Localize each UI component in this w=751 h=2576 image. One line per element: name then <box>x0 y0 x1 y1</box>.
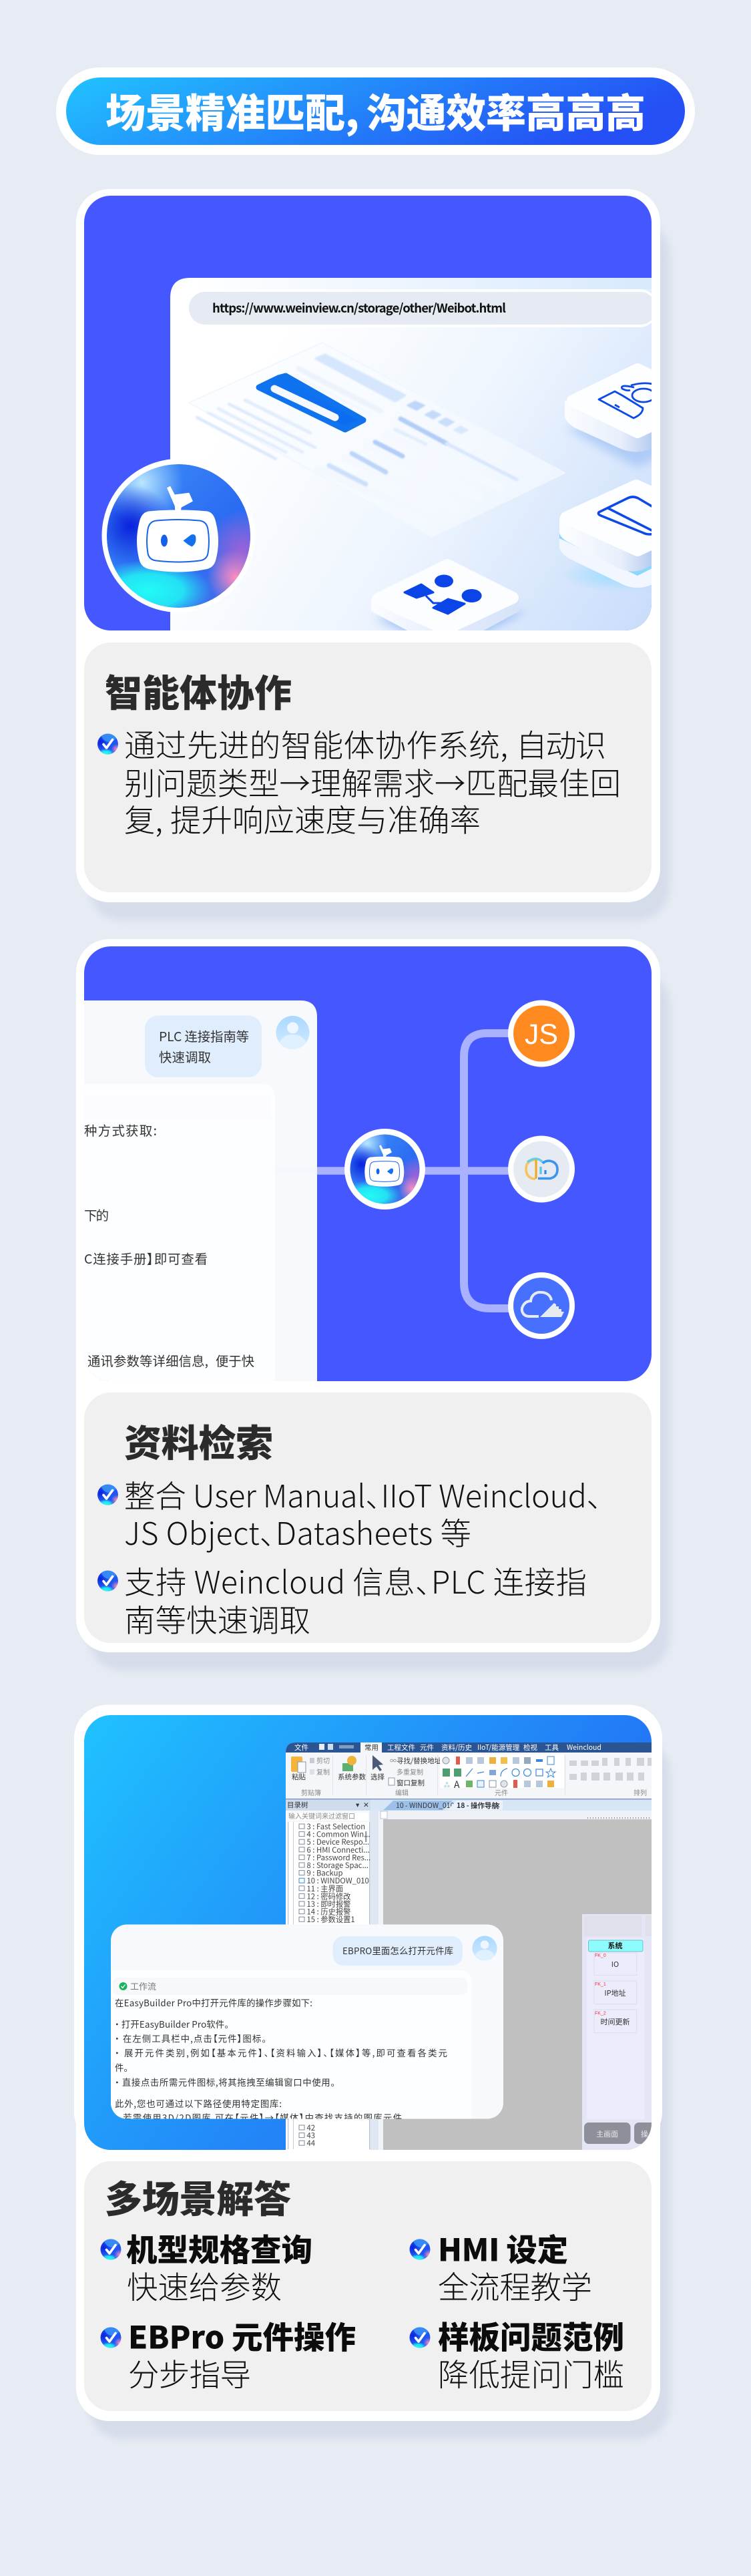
tree panel: 7 : Password Res... <box>307 1852 370 1863</box>
chat overlay <box>111 1925 503 2124</box>
user avatar <box>473 1936 497 1961</box>
body text: 复, <box>124 796 163 841</box>
answer card: • 展开元件类别,例如【基本元件】、【资料输入】、【媒体】等,即可查看各类元 <box>115 2046 447 2059</box>
title bar: 工具 <box>545 1742 559 1753</box>
bot avatar badge <box>101 459 250 612</box>
ribbon: 剪切 <box>316 1755 330 1765</box>
diagram: chat to knowledge sources <box>67 946 652 1389</box>
answer card: 下的 <box>84 1205 109 1224</box>
tree panel: 8 : Storage Spac... <box>307 1860 368 1871</box>
answer card: • 打开EasyBuilder Pro软件。 <box>115 2017 229 2030</box>
tab bar <box>286 1800 653 1811</box>
heading: 资料检索 <box>124 1414 273 1468</box>
HMI side menu: 操 <box>641 2129 648 2139</box>
user bubble: 快速调取 <box>159 1047 211 1066</box>
panel: 资料检索 card <box>67 939 670 1670</box>
tree panel: 5 : Device Respo... <box>307 1837 369 1847</box>
answer card: • 若需使用3D/2D图库,可在【元件】→【媒体】中查找支持的图库元件 <box>115 2110 402 2124</box>
ribbon: 系统参数 <box>338 1772 366 1782</box>
answer card: 在EasyBuilder Pro中打开元件库的操作步骤如下: <box>115 1996 312 2009</box>
bullet text 1: 整合 User Manual、IIoT Weincloud、 <box>124 1472 602 1517</box>
title bar: 元件 <box>420 1742 434 1753</box>
tree panel: 3 : Fast Selection <box>307 1821 365 1832</box>
HMI side menu: FK_2 <box>595 2012 606 2016</box>
title bar: 文件 <box>294 1742 308 1753</box>
check icon <box>93 726 121 758</box>
screenshot panel <box>84 1715 661 2151</box>
item: 机型规格查询: 快速给参数 <box>127 2263 282 2308</box>
node: JS: JS <box>525 1019 558 1051</box>
center bot node <box>344 1129 425 1210</box>
HMI side menu: 时间更新 <box>601 2016 630 2027</box>
item: 机型规格查询 <box>96 2226 312 2308</box>
title banner <box>56 67 695 155</box>
title bar <box>286 1742 654 1753</box>
icon cube: document stack <box>559 480 652 589</box>
HMI side menu <box>582 1914 661 2151</box>
ribbon: 窗口复制 <box>397 1778 425 1788</box>
ribbon: 寻找/替换地址 <box>397 1756 442 1766</box>
tree panel: 输入关键词来过滤窗口 <box>288 1811 355 1821</box>
answer card <box>111 1970 472 2124</box>
HMI side menu: FK_0 <box>595 1954 606 1958</box>
user bubble: EBPRO里面怎么打开元件库 <box>342 1944 453 1957</box>
title bar: Weincloud <box>567 1742 601 1753</box>
arrange icons (disabled) <box>569 1758 653 1781</box>
title bar: 工程文件 <box>387 1742 415 1753</box>
bullet text 2 <box>124 1558 587 1641</box>
ribbon: 多重复制 <box>397 1767 423 1777</box>
node: data cloud <box>508 1135 575 1202</box>
tree panel: 15 : 参数设置1 <box>307 1914 355 1925</box>
tree panel <box>286 1811 383 2151</box>
url text: https://www.weinview.cn/storage/other/Weibot.html <box>212 299 506 317</box>
body text <box>124 721 621 841</box>
ribbon: 粘贴 <box>292 1772 306 1782</box>
HMI side menu: IP地址 <box>604 1988 626 1998</box>
heading: 多场景解答 <box>105 2170 291 2224</box>
tab bar: ✕ <box>363 1800 369 1810</box>
check icon <box>93 1563 121 1595</box>
item: EBPro 元件操作: EBPro 元件操作 <box>128 2314 356 2358</box>
answer card: • 在左侧工具栏中,点击【元件】图标。 <box>115 2032 266 2045</box>
ribbon: 复制 <box>316 1767 330 1777</box>
tree panel: 6 : HMI Connecti... <box>307 1845 370 1855</box>
HMI side menu: 系统 <box>607 1940 622 1951</box>
item: EBPro 元件操作: 分步指导 <box>128 2351 251 2396</box>
bullet text 1 <box>124 1472 602 1554</box>
check icon <box>93 1477 121 1509</box>
item: 样板问题范例 <box>405 2314 624 2396</box>
title bar: 检视 <box>523 1742 537 1753</box>
bullet text 1: JS Object、Datasheets 等 <box>124 1509 471 1554</box>
item: 机型规格查询: 机型规格查询 <box>126 2226 312 2271</box>
answer card: 此外,您也可通过以下路径使用特定图库: <box>115 2096 282 2110</box>
HMI side menu: IO <box>611 1959 619 1970</box>
item: HMI 设定: HMI 设定 <box>438 2226 568 2271</box>
title banner: 场景精准匹配, <box>105 81 359 140</box>
element icons <box>443 1757 555 1791</box>
answer card: 便于快 <box>216 1350 254 1370</box>
title banner: 沟通效率高高高 <box>366 81 646 140</box>
tree panel: 4 : Common Win... <box>307 1829 370 1840</box>
chat panel <box>67 1000 317 1389</box>
node: cloud stairs <box>508 1272 575 1339</box>
ribbon: 排列 <box>634 1787 647 1797</box>
tree panel: 9 : Backup <box>307 1868 342 1879</box>
item: HMI 设定 <box>405 2226 592 2308</box>
item: HMI 设定: 全流程教学 <box>438 2263 592 2308</box>
HMI side menu: 主画面 <box>596 2129 618 2139</box>
ribbon <box>286 1753 653 1799</box>
isometric plate with content lines <box>189 343 565 537</box>
tree panel: 13 : 即时报警 <box>307 1899 350 1909</box>
body text: 别问题类型→理解需求→匹配最佳回 <box>124 759 621 804</box>
tab bar: 18 - 操作导航 <box>457 1801 499 1811</box>
canvas <box>379 1811 653 2151</box>
icon cube: flow nodes <box>371 559 525 630</box>
HMI side menu: FK_1 <box>595 1982 606 1987</box>
node: JS <box>508 1000 575 1067</box>
item: EBPro 元件操作 <box>96 2314 356 2396</box>
tab bar: ▾ <box>356 1800 360 1810</box>
answer card: C连接手册】即可查看 <box>84 1248 208 1268</box>
element icons: ⁂ <box>443 1779 451 1790</box>
tab bar: ✕ <box>495 1801 501 1811</box>
ribbon: 选择 <box>370 1772 385 1782</box>
answer card: 工作流 <box>130 1980 156 1992</box>
software window <box>286 1742 661 2151</box>
connector lines <box>317 1033 514 1308</box>
answer card <box>84 1124 254 1381</box>
text panel: 资料检索 <box>84 1393 652 1643</box>
bullet text 2: 支持 Weincloud 信息、PLC 连接指 <box>124 1558 587 1603</box>
item: 样板问题范例: 样板问题范例 <box>438 2314 624 2358</box>
item: 样板问题范例: 降低提问门槛 <box>438 2351 624 2396</box>
tab bar: 目录树 <box>287 1800 308 1810</box>
icon cube: agent support <box>565 363 652 470</box>
body text: 自动识 <box>516 721 606 766</box>
answer card: 通讯参数等详细信息, <box>87 1350 208 1370</box>
tree panel: 43 <box>307 2131 315 2141</box>
title bar: 资料/历史 <box>441 1742 473 1753</box>
tree panel: 42 <box>307 2123 315 2133</box>
answer card: • 直接点击所需元件图标,将其拖拽至编辑窗口中使用。 <box>115 2075 335 2088</box>
body text: 通过先进的智能体协作系统, <box>124 721 508 766</box>
answer card: 种方式获取: <box>84 1120 157 1139</box>
user bubble <box>332 1936 463 1966</box>
tree panel: 14 : 历史报警 <box>307 1907 350 1917</box>
user avatar <box>276 1016 310 1049</box>
ribbon: ∞ <box>390 1755 397 1765</box>
ribbon: 元件 <box>495 1787 508 1797</box>
ribbon: 剪贴簿 <box>301 1787 321 1797</box>
panel: 多场景解答 card <box>74 1704 670 2439</box>
element icons: A <box>454 1778 460 1791</box>
tree panel: 44 <box>307 2138 315 2149</box>
user bubble: PLC 连接指南等 <box>159 1026 249 1045</box>
tree panel: 10 : WINDOW_010 <box>307 1875 369 1886</box>
bullet text 2: 南等快速调取 <box>124 1596 310 1641</box>
heading: 智能体协作 <box>105 664 292 718</box>
tab bar: 10 - WINDOW_010 <box>396 1801 455 1811</box>
hero image: web page isometric scene <box>84 196 652 630</box>
ribbon: 编辑 <box>395 1787 409 1797</box>
panel: 智能体协作 card <box>76 189 712 920</box>
title bar: 常用 <box>364 1742 379 1753</box>
text panel: 智能体协作 <box>84 642 652 892</box>
answer card: 件。 <box>115 2060 128 2074</box>
body text: 提升响应速度与准确率 <box>170 796 481 841</box>
title bar: IIoT/能源管理 <box>477 1742 520 1753</box>
user bubble <box>145 1015 262 1077</box>
tree panel: 11 : 主界面 <box>307 1883 343 1894</box>
tree panel: 12 : 密码修改 <box>307 1891 350 1901</box>
text panel: 多场景解答 <box>84 2161 652 2411</box>
